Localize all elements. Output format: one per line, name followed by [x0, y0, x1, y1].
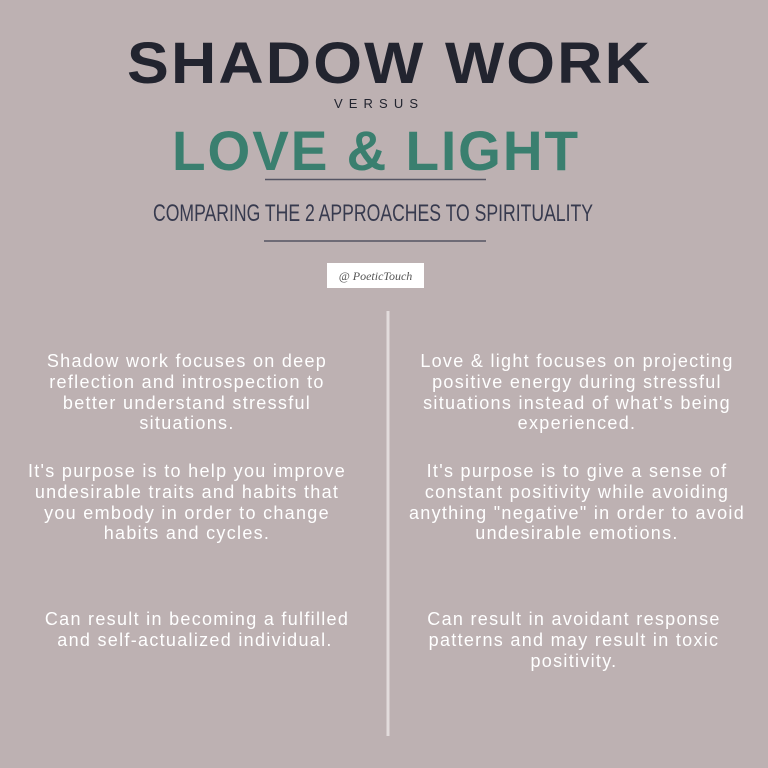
text block: shadow work result: Can result in becoming a fulfilled	[45, 609, 349, 629]
text block: shadow work focus	[47, 351, 327, 433]
text block: shadow work purpose: It's purpose is to help you improve	[28, 461, 346, 481]
divider: vertical	[386, 311, 390, 736]
text block: love & light purpose	[409, 461, 745, 543]
text block: love & light purpose: constant positivity while avoiding	[425, 482, 729, 502]
text block: love & light focus: experienced.	[518, 413, 636, 433]
text block: love & light focus	[420, 351, 734, 433]
text block: love & light result	[427, 609, 721, 671]
text block: love & light purpose: It's purpose is to give a sense of	[427, 461, 727, 481]
subtitle: COMPARING THE 2 APPROACHES TO SPIRITUALITY	[153, 200, 593, 227]
text block: shadow work purpose	[28, 461, 346, 543]
text block: love & light result: Can result in avoidant response	[427, 609, 721, 629]
watermark badge	[327, 263, 424, 288]
text block: love & light purpose: undesirable emotions.	[475, 523, 679, 543]
text block: love & light focus: positive energy during stressful	[432, 372, 722, 392]
text block: shadow work focus: situations.	[139, 413, 235, 433]
text block: shadow work purpose: you embody in order to change	[44, 503, 330, 523]
text block: love & light result: positivity.	[530, 651, 618, 671]
text block: shadow work result	[45, 609, 349, 650]
versus label: VERSUS	[334, 96, 418, 111]
text block: shadow work focus: better understand stressful	[63, 393, 311, 413]
text block: shadow work purpose: habits and cycles.	[104, 523, 270, 543]
watermark badge: @ PoeticTouch	[339, 269, 412, 283]
text block: shadow work purpose: undesirable traits and habits that	[35, 482, 339, 502]
text block: shadow work focus: Shadow work focuses on deep	[47, 351, 327, 371]
text block: shadow work focus: reflection and introspection to	[49, 372, 325, 392]
text block: love & light focus: Love & light focuses on projecting	[420, 351, 734, 371]
heading: love & light: LOVE & LIGHT	[172, 119, 580, 182]
text block: love & light result: patterns and may result in toxic	[429, 630, 719, 650]
text block: shadow work result: and self-actualized individual.	[57, 630, 333, 650]
text block: love & light purpose: anything "negative" in order to avoid	[409, 503, 745, 523]
title: SHADOW WORK	[127, 31, 652, 96]
text block: love & light focus: situations instead of what's being	[423, 393, 731, 413]
